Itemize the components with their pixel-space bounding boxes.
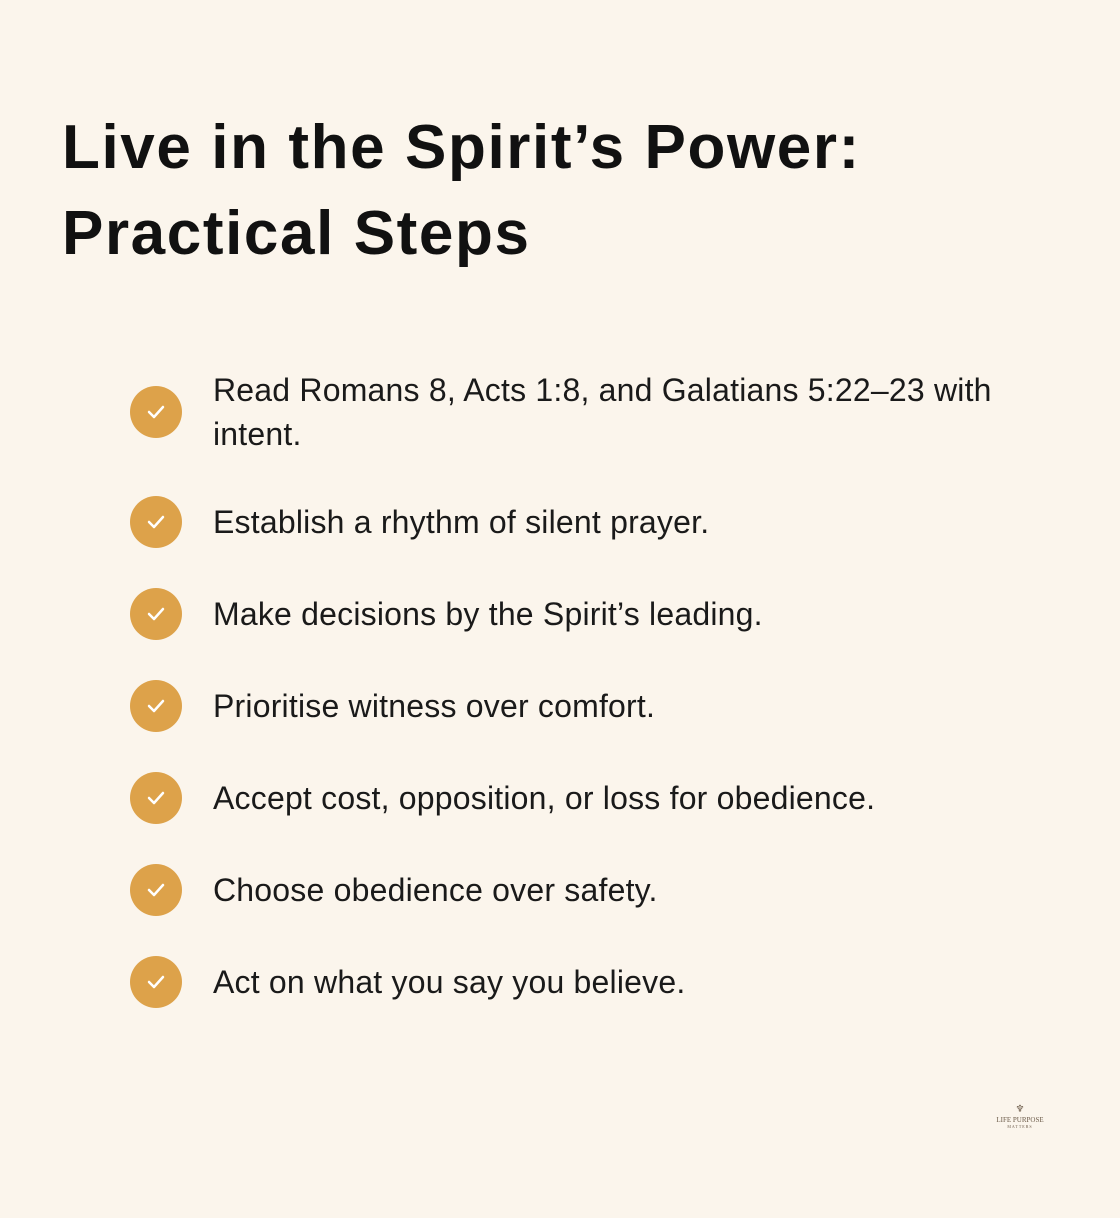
text: Make decisions by the Spirit’s leading. <box>213 596 763 632</box>
text: Prioritise witness over comfort. <box>213 688 655 724</box>
item 4 <box>130 680 655 732</box>
text: Establish a rhythm of silent prayer. <box>213 504 709 540</box>
text: Choose obedience over safety. <box>213 872 658 908</box>
text <box>213 372 992 452</box>
item 1 <box>130 372 992 452</box>
icon: check <box>130 864 182 916</box>
icon: check <box>130 680 182 732</box>
title: Live in the Spirit’s Power: <box>62 113 861 182</box>
logo: ♆ <box>1016 1104 1024 1115</box>
icon: check <box>130 496 182 548</box>
item 7 <box>130 956 685 1008</box>
text: Accept cost, opposition, or loss for obedience. <box>213 780 875 816</box>
item 2 <box>130 496 709 548</box>
item 5 <box>130 772 875 824</box>
icon: check <box>130 386 182 438</box>
title: Practical Steps <box>62 199 531 268</box>
icon: check <box>130 588 182 640</box>
item 6 <box>130 864 658 916</box>
icon: check <box>130 956 182 1008</box>
item 3 <box>130 588 763 640</box>
logo: MATTERS <box>1007 1124 1033 1129</box>
title <box>62 113 861 268</box>
text: Act on what you say you believe. <box>213 964 685 1000</box>
icon: check <box>130 772 182 824</box>
logo: LIFE PURPOSE <box>996 1116 1044 1124</box>
text: Read Romans 8, Acts 1:8, and Galatians 5:22–23 with <box>213 372 992 408</box>
text: intent. <box>213 416 302 452</box>
logo <box>996 1104 1044 1129</box>
